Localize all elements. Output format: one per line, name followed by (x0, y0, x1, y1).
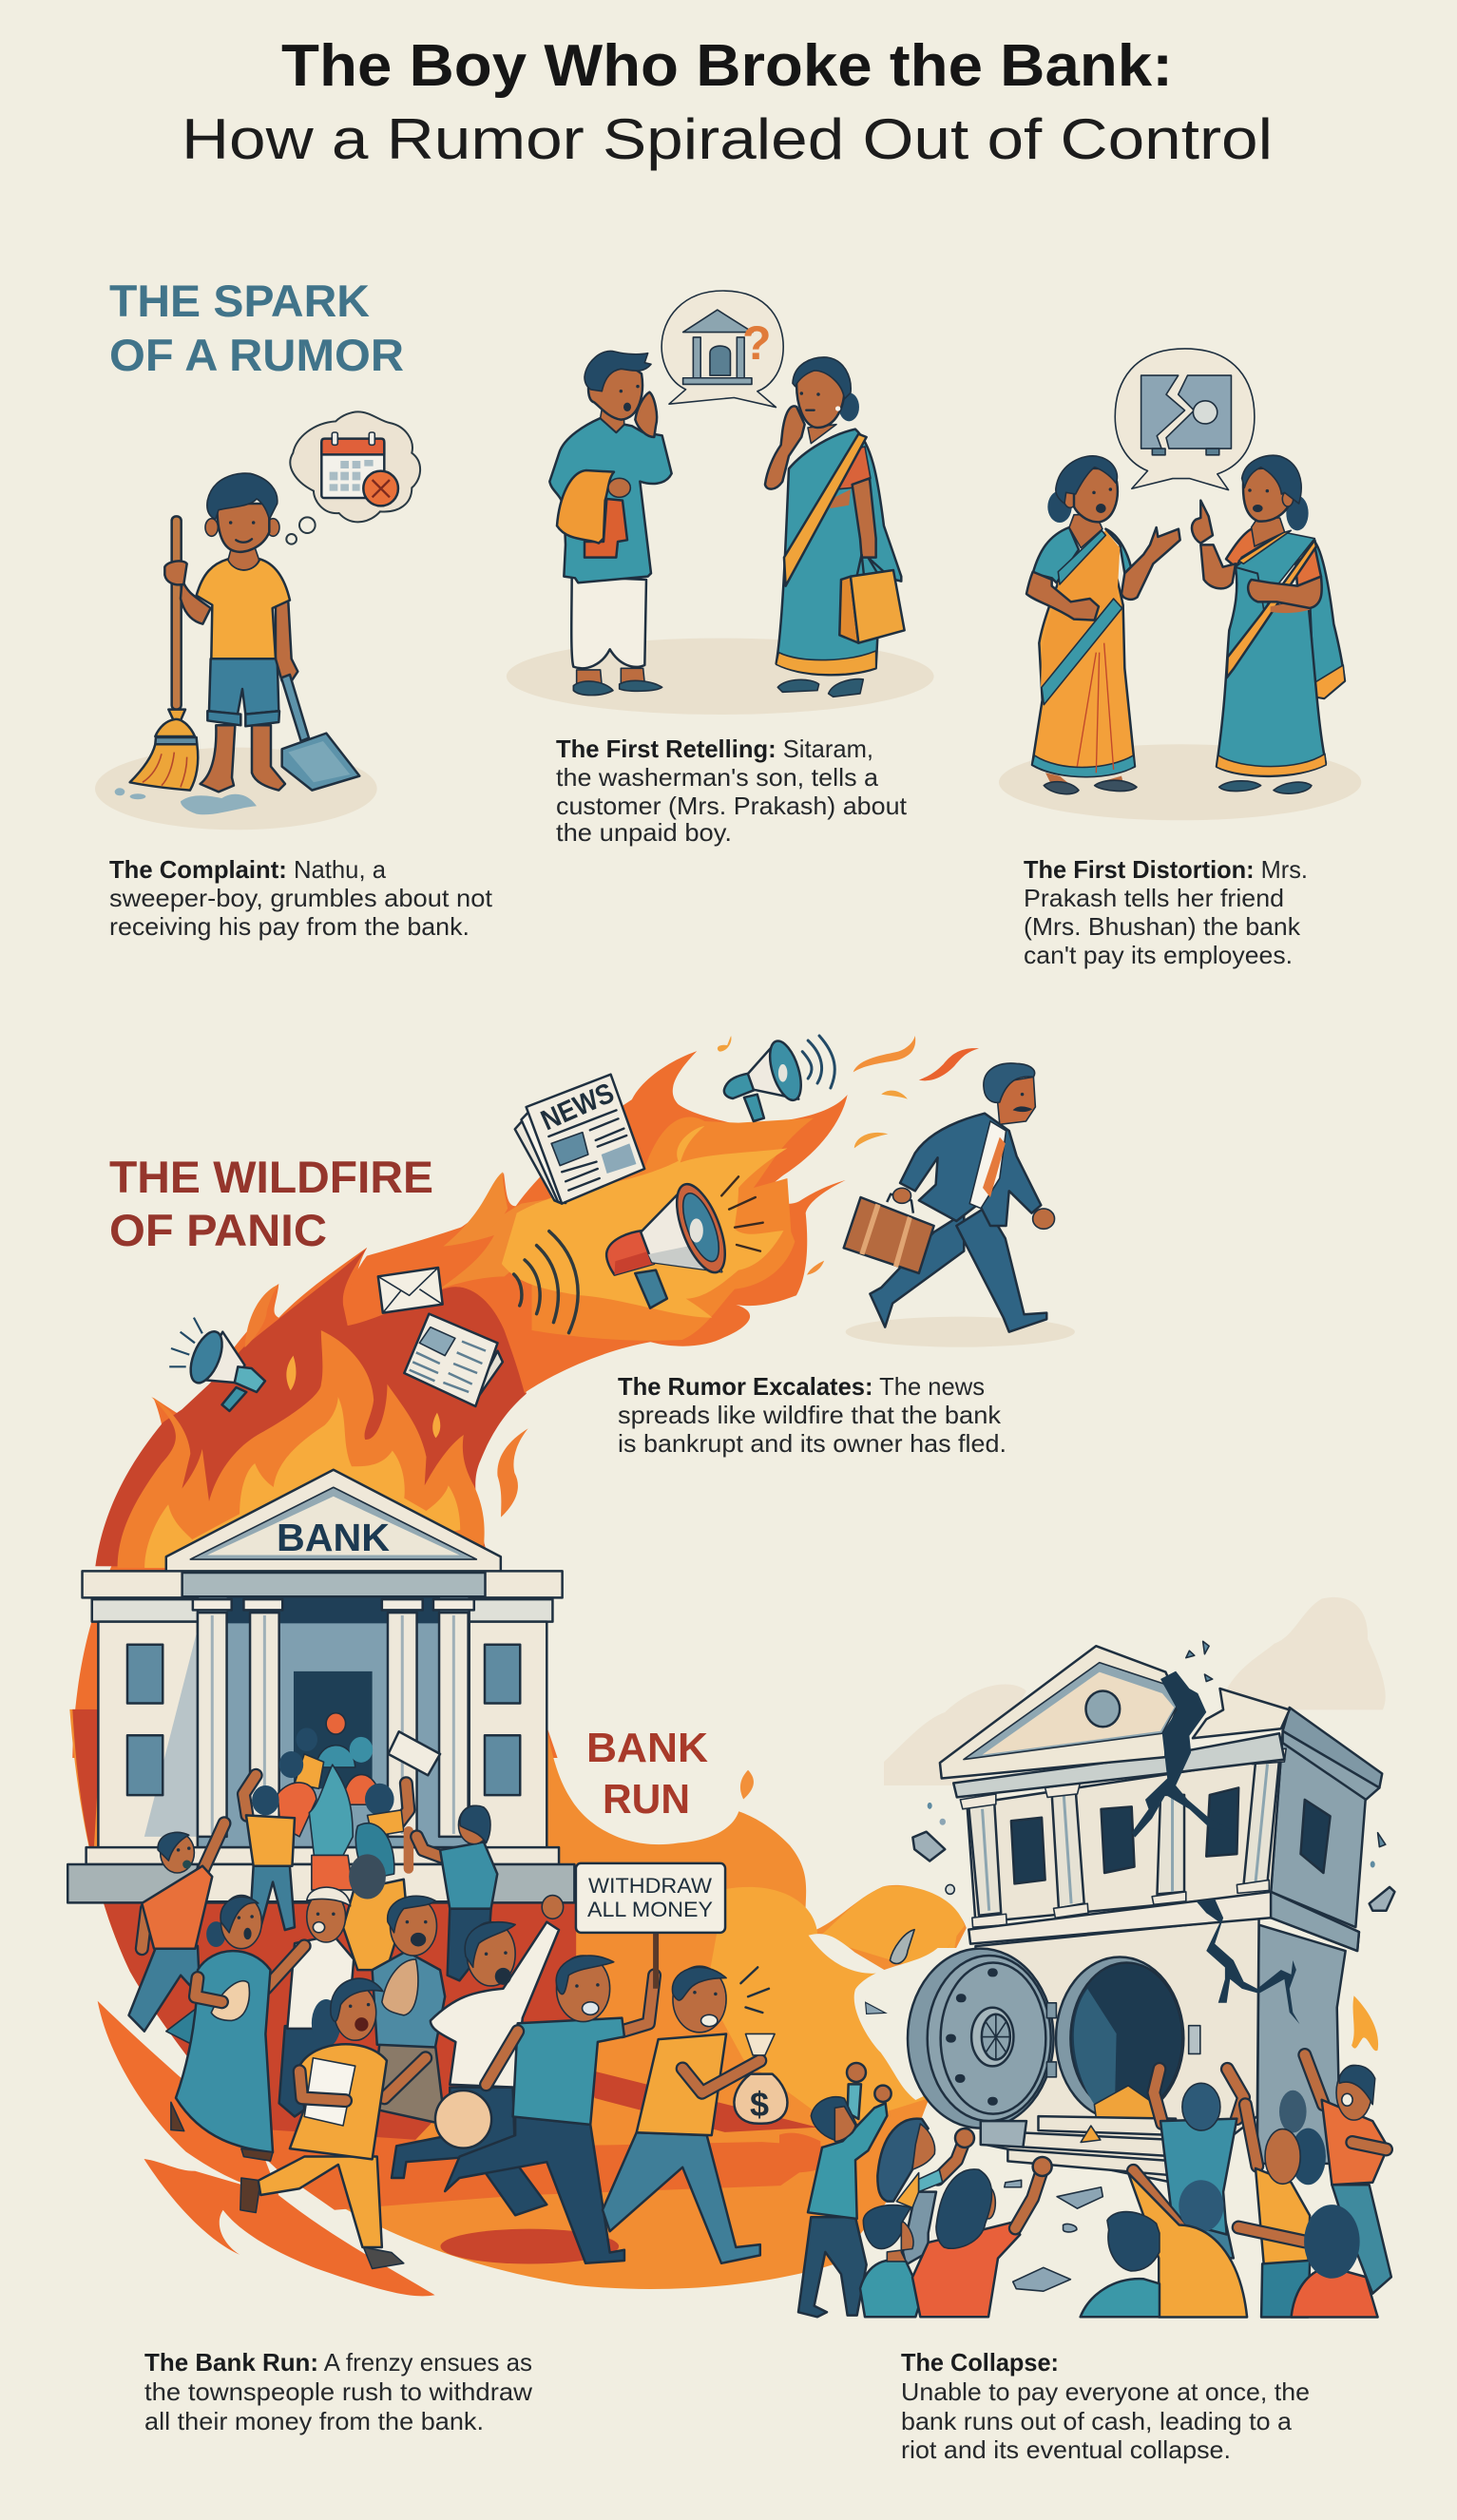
man with cloth (549, 351, 672, 696)
man in teal shirt on steps (417, 1805, 497, 1980)
illustration: sweeper boy with thought bubble (95, 411, 420, 830)
rioters: left group beneath the vault (798, 2063, 1160, 2317)
man in teal with raised fists (798, 2063, 891, 2317)
heading: the spark of a rumor: THE SPARK (109, 276, 370, 326)
text block: the collapse: The Collapse: (901, 2348, 1059, 2377)
text block: the collapse: bank runs out of cash, leading to a (901, 2407, 1293, 2435)
man in orange shirt (129, 1823, 224, 2032)
rioters: woman in yellow (1238, 2090, 1326, 2318)
text block: the first distortion: (Mrs. Bhushan) the bank (1024, 912, 1301, 941)
man in yellow shirt on steps (243, 1775, 295, 1930)
text block: the rumor excalates (618, 1372, 1006, 1458)
man in teal shirt with sack (435, 1956, 655, 2263)
icon: broom (130, 516, 198, 791)
dollar sign on money bag: $ (750, 2085, 769, 2124)
text block: the first distortion (1024, 855, 1308, 969)
dust clouds (884, 1597, 1386, 1785)
collapsing bank (884, 1597, 1394, 2318)
text block: the complaint (109, 855, 493, 941)
text block: the first distortion: can't pay its employees. (1024, 941, 1293, 969)
wildfire: lower flame sweep under the crowd (69, 1709, 967, 2296)
woman with shopping bag (765, 357, 905, 697)
text block: the collapse: Unable to pay everyone at once, the (901, 2377, 1310, 2406)
cracks (1132, 1671, 1299, 2024)
roof and pediment (940, 1646, 1382, 1800)
protest sign text: ALL MONEY (587, 1898, 713, 1921)
flame accent right (1352, 1995, 1378, 2051)
icon: newspaper stack (515, 1075, 644, 1204)
wildfire: flames above the bank with icons (95, 1172, 599, 1568)
speech bubble: broken vault (1115, 349, 1255, 490)
speech bubble: bank with question mark (661, 291, 783, 408)
text block: the rumor excalates: is bankrupt and its owner has fled. (618, 1429, 1006, 1458)
boy in teal (860, 2205, 922, 2317)
heading: the wildfire of panic (109, 1152, 433, 1255)
man in blue shirt with bag (373, 1896, 445, 2125)
rioters: man in teal, back view (1154, 2069, 1244, 2258)
heading: the spark of a rumor: OF A RUMOR (109, 330, 404, 380)
illustration: washerman's son and customer (507, 291, 934, 715)
text block: the first distortion: The First Distortion: Mrs. (1024, 855, 1308, 884)
text block: the bank run (144, 2348, 532, 2435)
lower wall and pillar (975, 1918, 1346, 2183)
vault door (908, 1949, 1056, 2129)
heading: the wildfire of panic: OF PANIC (109, 1205, 327, 1255)
text block: the first retelling: the washerman's son, tells a (556, 763, 879, 792)
text block: the first retelling (556, 735, 908, 847)
wildfire: "NEWS" headline: NEWS (536, 1078, 619, 1136)
text block: the bank run: The Bank Run: A frenzy ensues as (144, 2348, 532, 2377)
text block: the first retelling: customer (Mrs. Prakash) about (556, 792, 908, 820)
text block: the bank run: all their money from the bank. (144, 2407, 484, 2435)
heading: bank run: BANK (586, 1725, 708, 1771)
title: The Boy Who Broke the Bank: (281, 33, 1173, 99)
wildfire: upper flame silhouette (72, 1051, 848, 1758)
thought bubble: missed payday calendar (286, 411, 420, 544)
heading: bank run: RUN (603, 1776, 690, 1823)
icons: envelope, newspaper, megaphone and sound waves in the flames (169, 1231, 578, 1411)
upper facade (960, 1733, 1366, 1951)
text block: the bank run: the townspeople rush to withdraw (144, 2377, 532, 2406)
text block: the collapse (901, 2348, 1310, 2464)
woman in yellow with papers (240, 1978, 426, 2268)
text block: the collapse: riot and its eventual collapse. (901, 2435, 1231, 2464)
protest sign text: WITHDRAW (588, 1874, 712, 1898)
steps and rubble (890, 1641, 1394, 2291)
icon: question mark: ? (742, 316, 772, 370)
wildfire: pale gap beside the vault door (779, 1948, 969, 2174)
text block: the first retelling: The First Retelling: Sitaram, (556, 735, 873, 763)
man in white shirt with bundle (392, 1896, 564, 2215)
woman in orange, back view (912, 2157, 1052, 2317)
title: How a Rumor Spiraled Out of Control (182, 107, 1273, 171)
heading: the wildfire of panic: THE WILDFIRE (109, 1152, 433, 1202)
rioters: figures in foreground right (1128, 2170, 1378, 2318)
text block: the complaint: receiving his pay from the bank. (109, 912, 470, 941)
protest sign (576, 1863, 725, 1989)
older man in white shirt (279, 1887, 354, 2116)
columns (193, 1599, 474, 1837)
text block: the first retelling: the unpaid boy. (556, 818, 732, 847)
crowd rushing the bank (129, 1713, 787, 2268)
bank sign text: BANK (277, 1516, 390, 1559)
heading: the spark of a rumor (109, 276, 404, 380)
title (182, 33, 1273, 171)
windows (127, 1645, 520, 1795)
text block: the rumor excalates: spreads like wildfire that the bank (618, 1401, 1002, 1429)
people at the door (278, 1713, 440, 1970)
left woman in orange saree (1026, 456, 1180, 794)
text block: the complaint: sweeper-boy, grumbles about not (109, 884, 493, 912)
protest sign text (587, 1874, 713, 1921)
text block: the complaint: The Complaint: Nathu, a (109, 855, 387, 884)
icon: dustpan (281, 675, 359, 791)
text block: the first distortion: Prakash tells her friend (1024, 884, 1284, 912)
wildfire: flame tip detail with sparks (502, 1036, 979, 1341)
illustration: two women gossiping (999, 455, 1361, 820)
woman in yellow and teal (877, 2119, 974, 2264)
illustration: fleeing bank owner with briefcase (844, 1063, 1075, 1347)
man in yellow with money bag (603, 1966, 787, 2263)
right woman in teal saree (1192, 455, 1345, 793)
bank building (67, 1470, 574, 1902)
text block: the rumor excalates: The Rumor Excalates: The news (618, 1372, 985, 1401)
heading: bank run (586, 1725, 708, 1823)
icon: large megaphone (606, 1176, 763, 1308)
vault opening with gold (1056, 1957, 1200, 2120)
icon: small megaphone (724, 1036, 834, 1121)
man in teal, back view (1081, 2212, 1160, 2317)
rioters: man in orange, arm raised (1305, 2054, 1391, 2294)
woman in teal saree (166, 1896, 304, 2161)
